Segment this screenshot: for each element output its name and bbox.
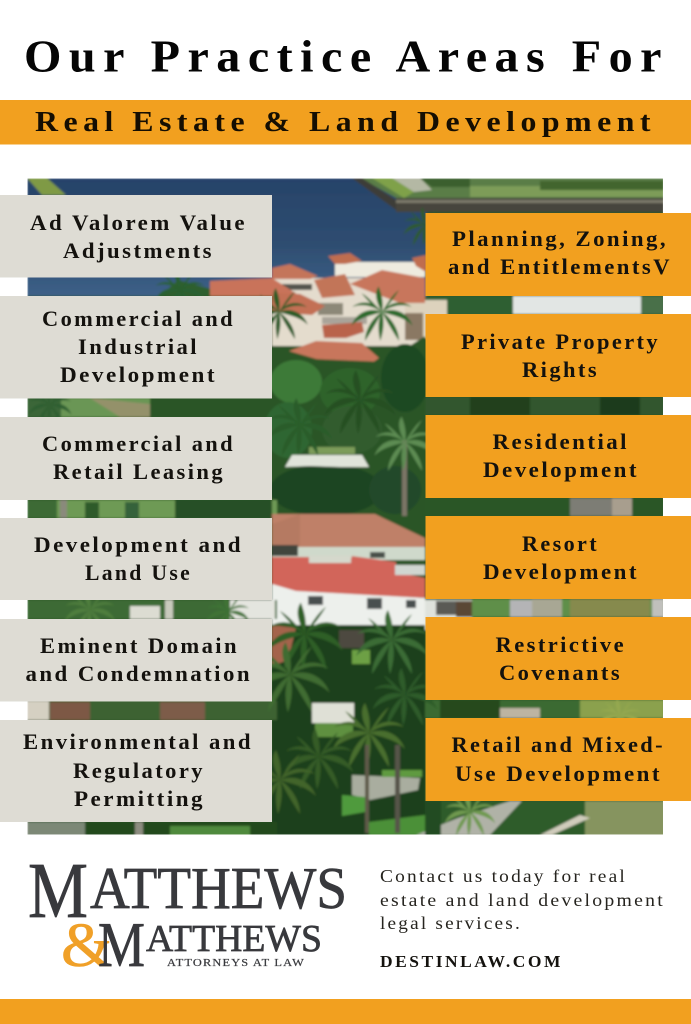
right panel: Private Property Rights: Private Property — [461, 329, 660, 354]
right panel: Planning, Zoning, and Entitlements: and EntitlementsV — [448, 254, 672, 279]
logo: Matthews & Matthews Attorneys at Law: ATTHEWS — [146, 918, 322, 960]
left panel: Environmental and Regulatory Permitting: Regulatory — [73, 758, 205, 783]
left strip 500-518 — [27, 500, 277, 518]
bottom left — [86, 822, 276, 834]
right panel: Resort Development — [426, 516, 691, 599]
left strip 277-296 — [160, 280, 215, 296]
banner: subtitle — [0, 100, 691, 144]
right strip 397-415 — [662, 397, 663, 415]
website: DESTINLAW.COM — [380, 952, 563, 971]
left panel: Environmental and Regulatory Permitting: Permitting — [74, 786, 205, 811]
left panel: Environmental and Regulatory Permitting — [0, 720, 272, 822]
left panel: Eminent Domain and Condemnation: and Condemnation — [26, 661, 252, 686]
mansion roofs — [210, 278, 300, 296]
banner: subtitle: Real Estate & Land Development — [35, 106, 656, 138]
right panel: Retail and Mixed-Use Development — [426, 718, 691, 801]
left strip 701-720 — [90, 700, 278, 721]
left panel: Commercial and Retail Leasing — [0, 417, 272, 500]
logo: Matthews & Matthews Attorneys at Law — [28, 848, 347, 980]
logo: Matthews & Matthews Attorneys at Law: M — [98, 909, 145, 980]
left strip 600-619 — [27, 600, 277, 619]
right strip 599-617 — [472, 599, 665, 617]
lower garden — [272, 625, 425, 835]
right panel: Private Property Rights — [426, 314, 691, 397]
left panel: Commercial and Retail Leasing: Commercial and — [42, 431, 235, 456]
water — [27, 178, 427, 296]
left panel: Commercial and Industrial Development: Development — [60, 362, 217, 387]
left panel: Commercial and Industrial Development — [0, 296, 272, 398]
contact text: legal services. — [380, 913, 522, 933]
logo: Matthews & Matthews Attorneys at Law: ATTHEWS — [90, 855, 347, 921]
right panel: Planning, Zoning, and Entitlements: Planning, Zoning, — [452, 226, 668, 251]
right strip 700-718 — [425, 700, 665, 718]
right panel: Residential Development — [426, 415, 691, 498]
right panel: Residential Development: Development — [483, 457, 639, 482]
far bank and seawall — [360, 178, 664, 200]
right panel: Planning, Zoning, and Entitlements — [426, 213, 691, 296]
left panel: Eminent Domain and Condemnation — [0, 619, 272, 702]
logo: Matthews & Matthews Attorneys at Law: ATTORNEYS AT LAW — [167, 958, 305, 969]
left panel: Environmental and Regulatory Permitting: Environmental and — [23, 729, 253, 754]
mansion walls — [272, 278, 425, 346]
right strip 498-516 — [662, 498, 663, 516]
left panel: Ad Valorem Value Adjustments: Ad Valorem Value — [30, 210, 247, 235]
right panel: Resort Development: Resort — [522, 531, 599, 556]
right panel: Restrictive Covenants: Restrictive — [496, 632, 626, 657]
contact text — [380, 866, 665, 933]
left panel: Development and Land Use — [0, 518, 272, 600]
right panel: Resort Development: Development — [483, 559, 639, 584]
left panel: Commercial and Retail Leasing: Retail Leasing — [53, 459, 225, 484]
footer bar — [0, 999, 691, 1024]
title: Our Practice Areas For — [24, 32, 669, 82]
right panel: Retail and Mixed-Use Development: Retail and Mixed- — [452, 732, 665, 757]
homes mid — [272, 514, 425, 550]
aerial photo of waterfront homes — [27, 178, 665, 836]
gap: right upper — [426, 296, 663, 314]
left panel: Ad Valorem Value Adjustments — [0, 195, 272, 278]
contact text: Contact us today for real — [380, 866, 627, 886]
right panel: Residential Development: Residential — [492, 429, 629, 454]
left panel: Commercial and Industrial Development: Industrial — [78, 334, 199, 359]
right panel: Retail and Mixed-Use Development: Use Development — [455, 761, 662, 786]
right panel: Private Property Rights: Rights — [522, 357, 599, 382]
right panel: Restrictive Covenants: Covenants — [499, 660, 622, 685]
logo: Matthews & Matthews Attorneys at Law: & — [61, 912, 112, 980]
tree mass — [274, 335, 426, 407]
right panel: Restrictive Covenants — [426, 617, 691, 700]
left panel: Ad Valorem Value Adjustments: Adjustments — [63, 238, 214, 263]
contact text: estate and land development — [380, 890, 665, 910]
bottom right — [425, 801, 665, 836]
palms — [260, 288, 308, 340]
left panel: Development and Land Use: Development and — [34, 532, 243, 557]
left panel: Eminent Domain and Condemnation: Eminent Domain — [40, 633, 239, 658]
logo: Matthews & Matthews Attorneys at Law: M — [28, 848, 88, 935]
left panel: Development and Land Use: Land Use — [85, 560, 192, 585]
left panel: Commercial and Industrial Development: Commercial and — [42, 306, 235, 331]
